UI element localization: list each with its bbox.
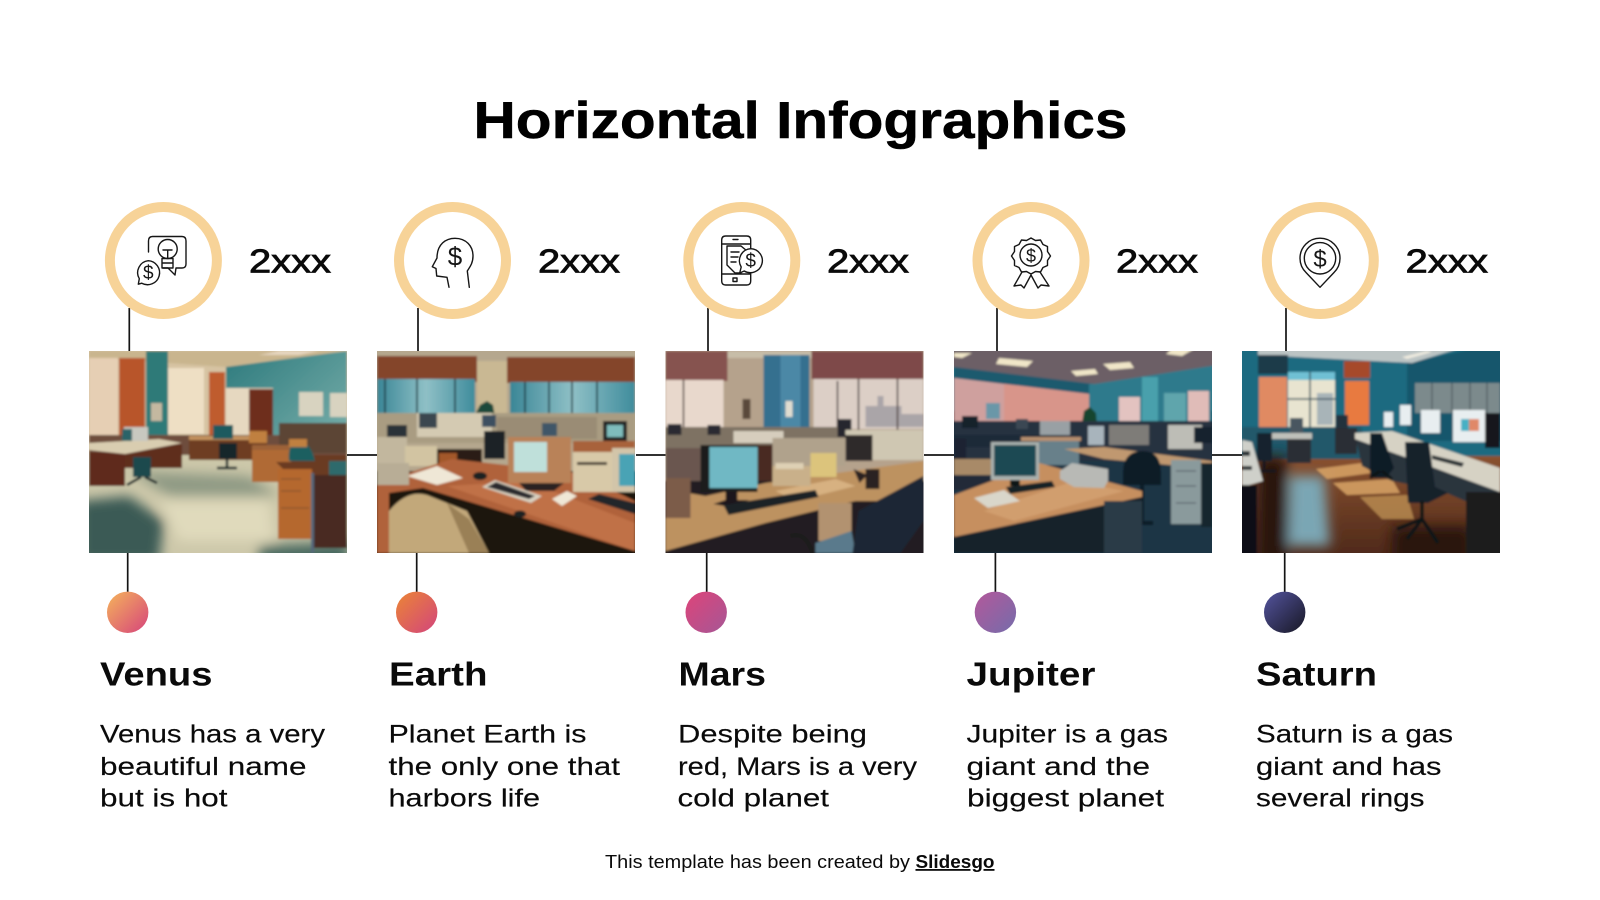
- connector lines: [417, 308, 666, 592]
- photo: wood-panelled office with retro computers: [377, 351, 635, 553]
- connector lines: [1285, 308, 1286, 592]
- year label: 2xxx: [1406, 242, 1489, 280]
- planet dot: [1264, 592, 1305, 633]
- footer credit: Slidesgo: [916, 852, 995, 872]
- heading: Venus: [100, 656, 212, 692]
- description: [388, 720, 620, 812]
- description: beautiful name: [100, 753, 306, 781]
- panel: Earth: [367, 207, 666, 812]
- description: Saturn is a gas: [1256, 720, 1453, 748]
- photo: modern teal office with wood floor: [1242, 351, 1500, 553]
- photo: office with city-view windows: [666, 351, 924, 553]
- description: Venus has a very: [100, 720, 326, 748]
- connector lines: [995, 308, 1242, 592]
- panel: Mars: [656, 207, 954, 812]
- icon ring: [978, 207, 1084, 314]
- description: [966, 720, 1168, 812]
- icon: location pin with dollar: $: [1313, 246, 1327, 273]
- connector lines: [707, 308, 954, 592]
- description: [100, 720, 326, 812]
- planet dot: [686, 592, 727, 633]
- description: [1256, 720, 1453, 812]
- heading: Mars: [678, 656, 766, 692]
- icon ring: [688, 207, 795, 314]
- icon: head with dollar: [432, 238, 473, 287]
- photo: retro office with teal walls: [89, 351, 347, 553]
- panel: Saturn: [1232, 207, 1510, 812]
- description: red, Mars is a very: [678, 753, 918, 781]
- description: several rings: [1256, 784, 1424, 812]
- icon ring: [1267, 207, 1374, 314]
- year label: 2xxx: [249, 242, 332, 280]
- year label: 2xxx: [538, 242, 621, 280]
- description: cold planet: [678, 784, 829, 812]
- icon: award badge: [1012, 238, 1050, 288]
- description: giant and has: [1256, 753, 1442, 781]
- description: giant and the: [966, 753, 1150, 781]
- heading: Jupiter: [966, 656, 1096, 692]
- planet dot: [975, 592, 1016, 633]
- description: [678, 720, 918, 812]
- icon: location pin with dollar: [1300, 238, 1340, 287]
- photo: office with pink blinds and teal walls: [954, 351, 1212, 553]
- description: the only one that: [388, 753, 620, 781]
- panel: Jupiter: [944, 207, 1242, 812]
- planet dot: [396, 592, 437, 633]
- year label: 2xxx: [827, 242, 910, 280]
- footer credit: This template has been created by: [605, 852, 910, 872]
- year label: 2xxx: [1116, 242, 1199, 280]
- icon ring: [110, 207, 217, 314]
- description: Planet Earth is: [388, 720, 586, 748]
- description: Jupiter is a gas: [966, 720, 1168, 748]
- icon: head with dollar: $: [448, 242, 463, 272]
- title: Horizontal Infographics: [474, 92, 1128, 150]
- icon: idea and money speech bubbles: [138, 236, 186, 285]
- icon: smartphone with bill: $: [745, 251, 756, 272]
- icon ring: [399, 207, 506, 314]
- planet dot: [107, 592, 148, 633]
- description: biggest planet: [967, 784, 1164, 812]
- connector lines: [128, 308, 377, 592]
- heading: Saturn: [1256, 656, 1377, 692]
- description: harbors life: [388, 784, 540, 812]
- panel: Venus: [79, 207, 377, 812]
- icon: award badge: $: [1026, 246, 1036, 266]
- icon: smartphone with bill: [722, 236, 762, 285]
- description: Despite being: [678, 720, 867, 748]
- icon: idea and money speech bubbles: $: [143, 263, 154, 284]
- heading: Earth: [389, 656, 488, 692]
- description: but is hot: [100, 784, 228, 812]
